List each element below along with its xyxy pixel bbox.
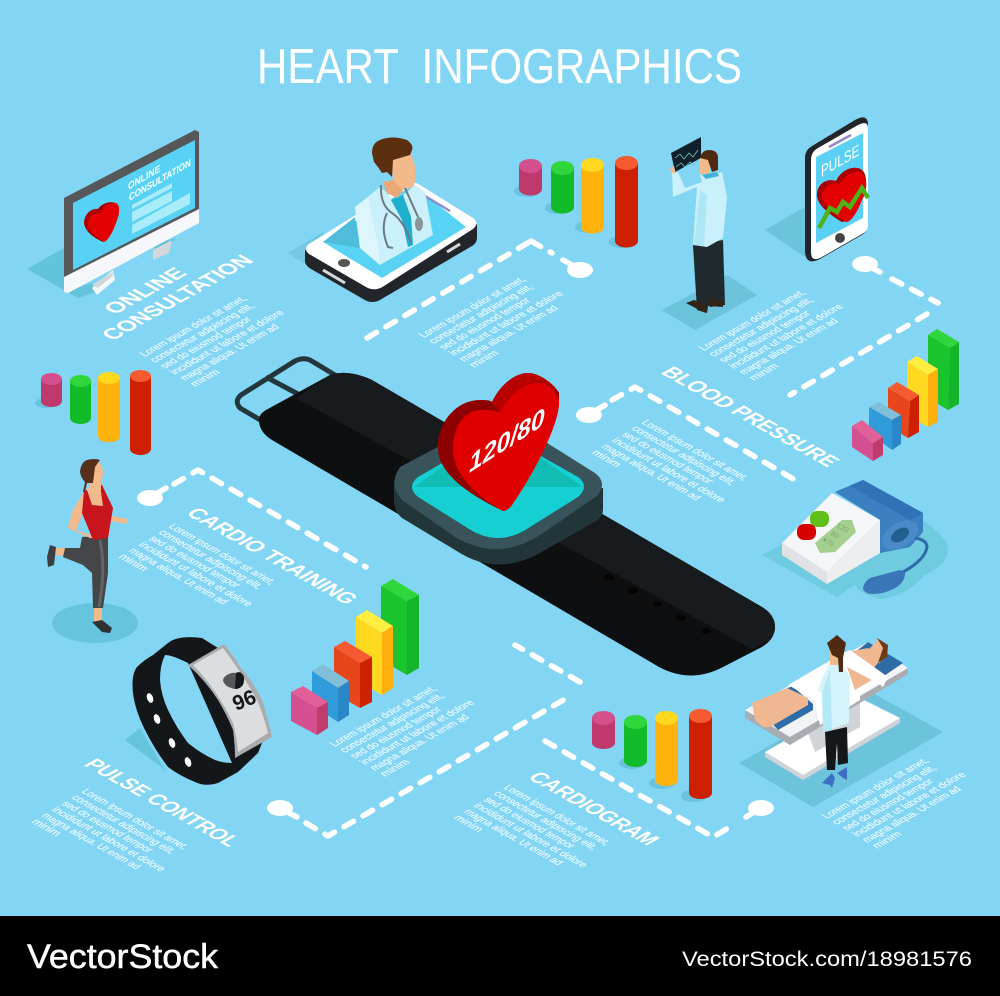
text block: doctor on smartphone [416,272,587,369]
panel: blood pressure [588,363,948,599]
heading: online consultation: CONSULTATION [96,251,259,343]
text block: blood pressure: magna aliqua. Ut enim ad [598,443,704,502]
display: 120 [835,521,850,535]
watch screen [412,440,584,538]
text block: doctor with patient: magna aliqua. Ut enim ad [860,785,965,844]
icon: red heart on screen [84,202,119,242]
text block: pulse control [28,787,198,886]
icon: pulse smartphone [765,117,868,261]
text block: cardiogram: minim [450,814,486,834]
text block: center chart: Lorem ipsum dolor sit amet, [327,685,440,749]
text block: online consultation: Lorem ipsum dolor sit amet, [137,295,250,359]
bracelet display [188,644,272,758]
text block: center chart [327,681,498,778]
text block: pulse control: magna aliqua. Ut enim ad [38,812,144,871]
watch case [394,426,603,564]
text block: cardiogram: sed do eiusmod tempor [480,795,578,851]
text block: doctor on smartphone: incididunt ut labore et dolore [446,290,566,357]
text block: x-ray doctor: incididunt ut labore et dolore [726,303,846,370]
text block: x-ray doctor: Lorem ipsum dolor sit amet, [696,289,809,353]
text block: pulse control: minim [28,818,64,838]
screen label: CONSULTATION [129,158,191,204]
text block: blood pressure: minim [588,449,624,469]
dashed connector: pulse control [267,645,580,836]
strap holes [604,574,711,634]
footer url: VectorStock.com/18981576 [682,948,972,971]
text block: pulse control: sed do eiusmod tempor [58,799,156,855]
text block: cardio training: minim [115,553,151,573]
text block: cardio training: Lorem ipsum dolor sit amet, [165,522,278,586]
text block: pulse control: incididunt ut labore et dolore [48,805,168,873]
text block: doctor on smartphone: sed do eiusmod tempor [436,296,534,351]
panel: pulse control [28,637,272,886]
text block: doctor with patient: sed do eiusmod tempor [839,777,937,832]
icon: smartphone with doctor [288,138,477,305]
heading: cardio training: CARDIO TRAINING [181,504,364,608]
text block: blood pressure: consectetur adipiscing elit, [628,424,739,487]
icon: doctor holding x-ray [662,137,757,330]
footer logo: VectorStock [27,938,219,976]
doctor [818,635,850,788]
display [815,520,856,553]
text block: cardio training: incididunt ut labore et dolore [135,540,255,608]
heading: cardiogram: CARDIOGRAM [523,768,665,849]
buckle [237,359,340,421]
text block: cardio training [115,522,285,621]
panel: cardiogram [450,635,990,882]
icon: 3d heart [438,373,559,511]
heading: online consultation: ONLINE [98,264,192,317]
footer bar [0,916,1000,996]
panel: x-ray doctor [662,137,867,382]
text block: doctor on smartphone: magna aliqua. Ut enim ad [457,304,562,363]
text block: doctor on smartphone: consectetur adipiscing elit, [426,283,537,345]
icon: computer monitor [27,130,199,298]
bracelet display: 96 [229,686,260,716]
bar chart: center left [291,579,419,735]
text block: blood pressure: sed do eiusmod tempor [618,430,716,486]
text block: x-ray doctor [696,285,867,382]
title: HEART INFOGRAPHICS [257,40,742,94]
dashed connector: blood pressure [576,387,802,484]
text block: center chart: incididunt ut labore et dolore [357,699,477,766]
text block: x-ray doctor: minim [747,362,782,382]
doctor bust [355,138,433,265]
text block: x-ray doctor: sed do eiusmod tempor [716,309,814,364]
panel: doctor on smartphone [288,138,587,369]
text block: center chart: magna aliqua. Ut enim ad [368,713,473,772]
heading: blood pressure: BLOOD PRESSURE [656,363,845,470]
text block: doctor with patient: Lorem ipsum dolor sit amet, [819,757,932,821]
text block: doctor with patient [819,753,990,850]
screen label: ONLINE [128,163,160,193]
text block: x-ray doctor: consectetur adipiscing elit, [706,296,817,358]
text block: blood pressure: Lorem ipsum dolor sit amet, [638,418,751,482]
dashed connector: cardio training [137,470,366,567]
text block: online consultation: minim [188,368,223,388]
text block: cardiogram: incididunt ut labore et dolore [470,801,590,869]
text block: cardiogram: consectetur adipiscing elit, [490,789,601,852]
text block: pulse control: Lorem ipsum dolor sit amet, [78,787,191,851]
text block: doctor with patient: incididunt ut labore et dolore [849,771,969,838]
text block: blood pressure: incididunt ut labore et dolore [608,436,728,504]
text block: online consultation [137,291,308,388]
panel: online consultation [27,130,308,388]
text block: online consultation: magna aliqua. Ut enim ad [178,323,283,382]
cylinder chart: top [514,156,638,248]
text block: x-ray doctor: magna aliqua. Ut enim ad [737,317,842,376]
dashed connector: consultation phone [367,241,593,338]
text block: cardio training: magna aliqua. Ut enim ad [125,547,231,606]
heading: pulse control: PULSE CONTROL [79,755,247,850]
display: 80 [829,529,841,541]
icon: blood pressure monitor [762,480,948,599]
icon: fitness bracelet [125,637,272,785]
text block: center chart: minim [378,758,413,778]
panel: smart watch [237,359,775,676]
text block: online consultation: incididunt ut labore et dolore [167,309,287,376]
icon: doctor with patient on table [739,635,943,807]
panel: cardio training [47,459,364,643]
cylinder chart: bottom [592,709,712,802]
patient [752,638,888,727]
text block: online consultation: sed do eiusmod tempor [157,315,255,370]
buttons [810,511,829,527]
text block: cardiogram [450,783,620,882]
cylinder chart: left [35,370,151,455]
text block: cardiogram: Lorem ipsum dolor sit amet, [500,783,613,847]
text block: blood pressure [588,418,758,517]
text block: doctor with patient: consectetur adipiscing elit, [829,764,940,826]
icon: running woman [47,459,138,643]
display: ♥70 [821,537,835,548]
text block: doctor with patient: minim [870,830,905,850]
dashed connector: cardiogram [545,741,774,837]
text block: cardio training: consectetur adipiscing elit, [155,528,266,591]
strap [259,373,775,676]
text block: cardio training: sed do eiusmod tempor [145,534,243,590]
text block: cardiogram: magna aliqua. Ut enim ad [460,808,566,867]
text block: center chart: consectetur adipiscing elit, [337,692,448,754]
text block: center chart: sed do eiusmod tempor [347,705,445,760]
phone label: pulse: PULSE [821,141,859,181]
text block: doctor on smartphone: Lorem ipsum dolor sit amet, [416,276,529,340]
blood pressure value: 120/80 [469,402,545,479]
text block: pulse control: consectetur adipiscing elit, [68,793,179,856]
bar chart: top right [852,329,959,461]
text block: online consultation: consectetur adipiscing elit, [147,302,258,364]
strap holes [145,692,193,768]
dashed connector: pulse phone [790,256,938,395]
text block: doctor on smartphone: minim [467,349,502,369]
